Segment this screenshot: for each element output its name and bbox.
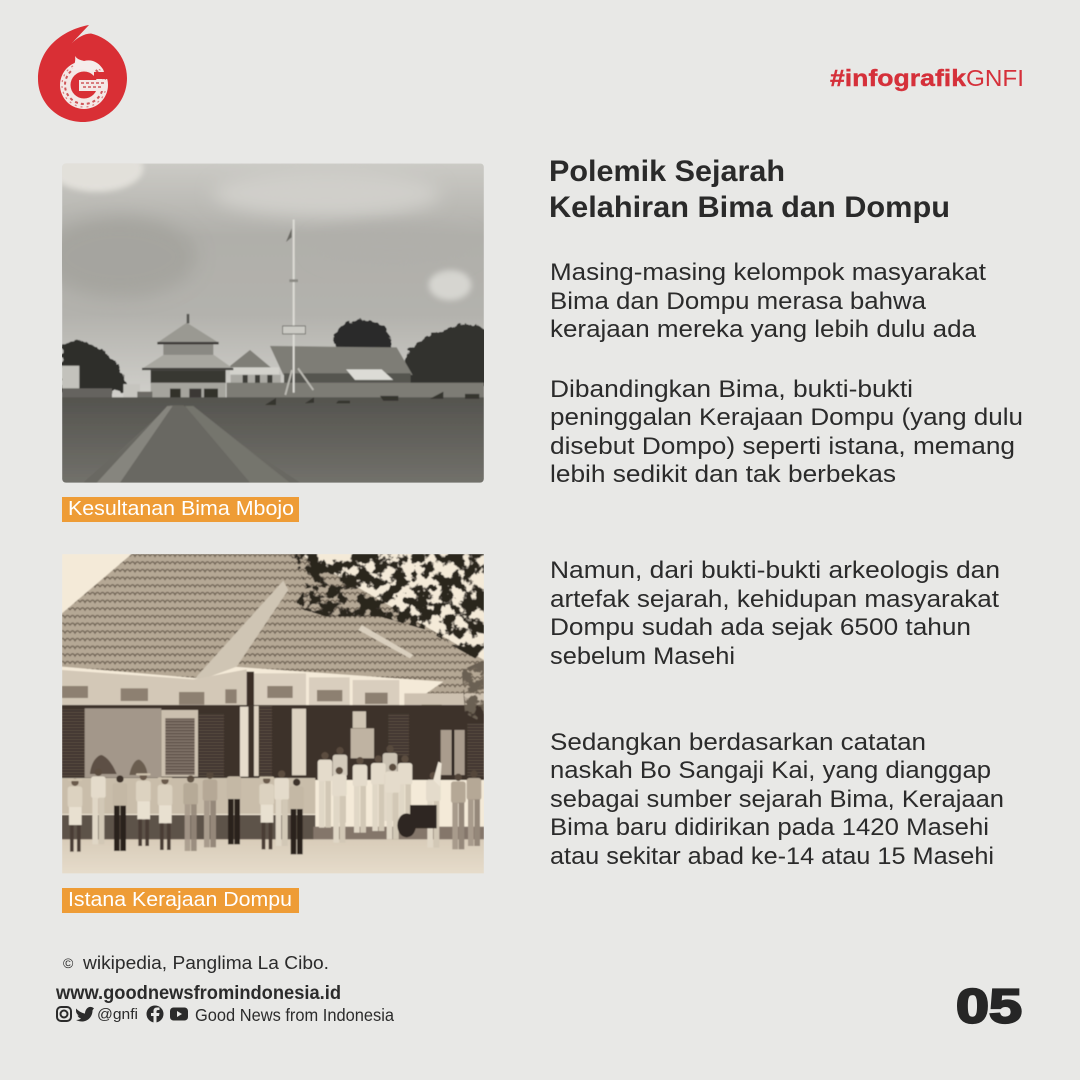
paragraph 3: Namun, dari bukti-bukti arkeologis dan	[550, 557, 1000, 584]
tree foliage	[290, 554, 484, 723]
group of people	[68, 745, 481, 854]
paragraph 3: artefak sejarah, kehidupan masyarakat	[550, 586, 999, 613]
paragraph 2: peninggalan Kerajaan Dompu (yang dulu	[550, 404, 1023, 431]
paragraph 1: kerajaan mereka yang lebih dulu ada	[550, 316, 977, 343]
paragraph 2: disebut Dompo) seperti istana, memang	[550, 433, 1015, 460]
paragraph 4: Bima baru didirikan pada 1420 Masehi	[550, 814, 989, 841]
paragraph 1: Bima dan Dompu merasa bahwa	[550, 288, 927, 315]
handle text: @gnfi	[97, 1006, 138, 1023]
veranda	[62, 705, 484, 780]
photo credit: ©	[63, 955, 74, 971]
stone base	[62, 814, 316, 840]
logo: GNFI red six with eagle G	[38, 25, 127, 122]
heading	[549, 155, 950, 224]
icon: instagram	[57, 1007, 71, 1021]
dirt road	[97, 405, 208, 481]
paragraph 4: Sedangkan berdasarkan catatan	[550, 729, 926, 756]
long hall	[270, 346, 413, 375]
paragraph 2	[550, 376, 1023, 488]
wall band	[62, 669, 247, 707]
paragraph 1: Masing-masing kelompok masyarakat	[550, 259, 986, 286]
paragraph 2: Dibandingkan Bima, bukti-bukti	[550, 376, 913, 403]
cannons	[265, 392, 479, 405]
ground	[62, 839, 484, 874]
trees left	[62, 342, 126, 392]
window people	[90, 755, 117, 774]
hashtag: infografikGNFI: #infografik	[830, 65, 966, 91]
photo credit: wikipedia, Panglima La Cibo.	[82, 952, 329, 973]
fence	[62, 388, 112, 398]
heading: Polemik Sejarah	[549, 155, 785, 188]
small house	[230, 350, 280, 373]
paragraph 4	[550, 729, 1004, 870]
paragraph 3	[550, 557, 1000, 670]
paragraph 4: sebagai sumber sejarah Bima, Kerajaan	[550, 786, 1004, 813]
hashtag: infografikGNFI: GNFI	[966, 65, 1024, 91]
paragraph 4: atau sekitar abad ke-14 atau 15 Masehi	[550, 843, 994, 870]
photo: Kesultanan Bima Mbojo	[62, 164, 484, 483]
heading: Kelahiran Bima dan Dompu	[549, 191, 950, 224]
paragraph 1	[550, 259, 986, 343]
paragraph 2: lebih sedikit dan tak berbekas	[550, 461, 896, 488]
icon: facebook	[146, 1006, 164, 1023]
icon: youtube	[170, 1008, 188, 1020]
icon: twitter	[76, 1007, 94, 1022]
ground	[62, 397, 484, 483]
trees right	[333, 320, 391, 350]
page name: Good News from Indonesia	[195, 1005, 394, 1025]
caption: Istana Kerajaan Dompu: Istana Kerajaan Dompu	[68, 889, 292, 911]
hashtag: infografikGNFI	[830, 65, 1024, 91]
plinth	[62, 778, 315, 814]
photo: Istana Kerajaan Dompu	[62, 554, 484, 874]
left shed	[62, 366, 79, 392]
pavilion	[157, 323, 219, 343]
flagpole	[283, 219, 313, 395]
paragraph 3: sebelum Masehi	[550, 643, 735, 670]
website url: www.goodnewsfromindonesia.id	[55, 983, 341, 1004]
caption: Kesultanan Bima Mbojo: Kesultanan Bima Mbojo	[68, 498, 294, 520]
paragraph 4: naskah Bo Sangaji Kai, yang dianggap	[550, 757, 991, 784]
roof	[62, 554, 484, 697]
page number: 05	[956, 980, 1022, 1034]
social handles	[57, 1005, 394, 1025]
paragraph 3: Dompu sudah ada sejak 6500 tahun	[550, 614, 971, 641]
